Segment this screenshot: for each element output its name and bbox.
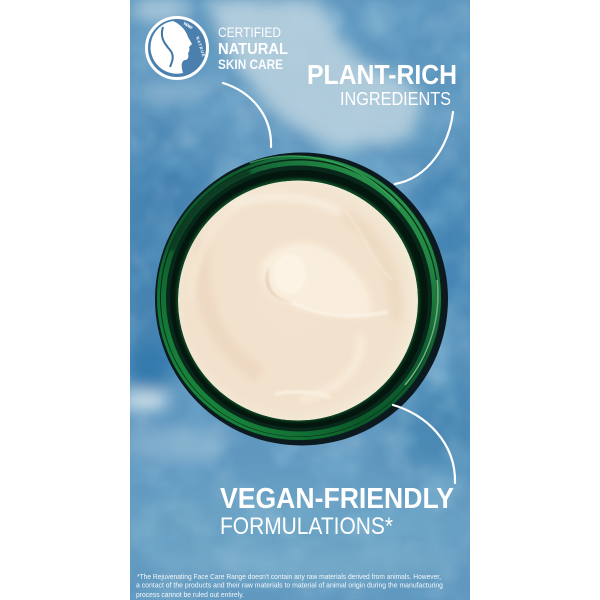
- text: certified natural skin care: SKIN CARE: [218, 57, 283, 72]
- heading: vegan-friendly formulations: VEGAN-FRIENDLY: [220, 483, 454, 515]
- arrow: plant-rich to jar: [395, 112, 453, 184]
- text: footnote: [136, 572, 443, 599]
- panel: watercolour background: [130, 0, 470, 600]
- text: footnote: a contact of the products and their raw materials to material of animal origin during the manufacturing: [136, 580, 443, 590]
- heading: vegan-friendly formulations: [220, 483, 454, 540]
- text: footnote: process cannot be ruled out entirely.: [136, 590, 244, 599]
- text: footnote: *The Rejuvenating Face Care Range doesn't contain any raw materials derived from animals. However,: [137, 572, 441, 581]
- jar: green glass rim with cream: [155, 152, 448, 446]
- arrow: certified natural to jar: [223, 83, 271, 147]
- icon: natural skin care seal: NATRUE: [195, 36, 206, 57]
- text: certified natural skin care: CERTIFIED: [218, 24, 281, 40]
- heading: plant-rich ingredients: INGREDIENTS: [340, 89, 451, 109]
- heading: plant-rich ingredients: PLANT-RICH: [307, 59, 457, 90]
- icon: natural skin care seal: WWW: [182, 21, 194, 30]
- text: certified natural skin care: NATURAL: [218, 41, 288, 58]
- cream surface: [178, 180, 418, 420]
- text: certified natural skin care: [218, 24, 288, 72]
- rim highlight: [172, 172, 250, 250]
- arrow: vegan-friendly to jar: [393, 405, 455, 483]
- icon: natural skin care seal: [146, 18, 208, 78]
- heading: plant-rich ingredients: [307, 59, 457, 109]
- heading: vegan-friendly formulations: FORMULATIONS*: [220, 513, 393, 540]
